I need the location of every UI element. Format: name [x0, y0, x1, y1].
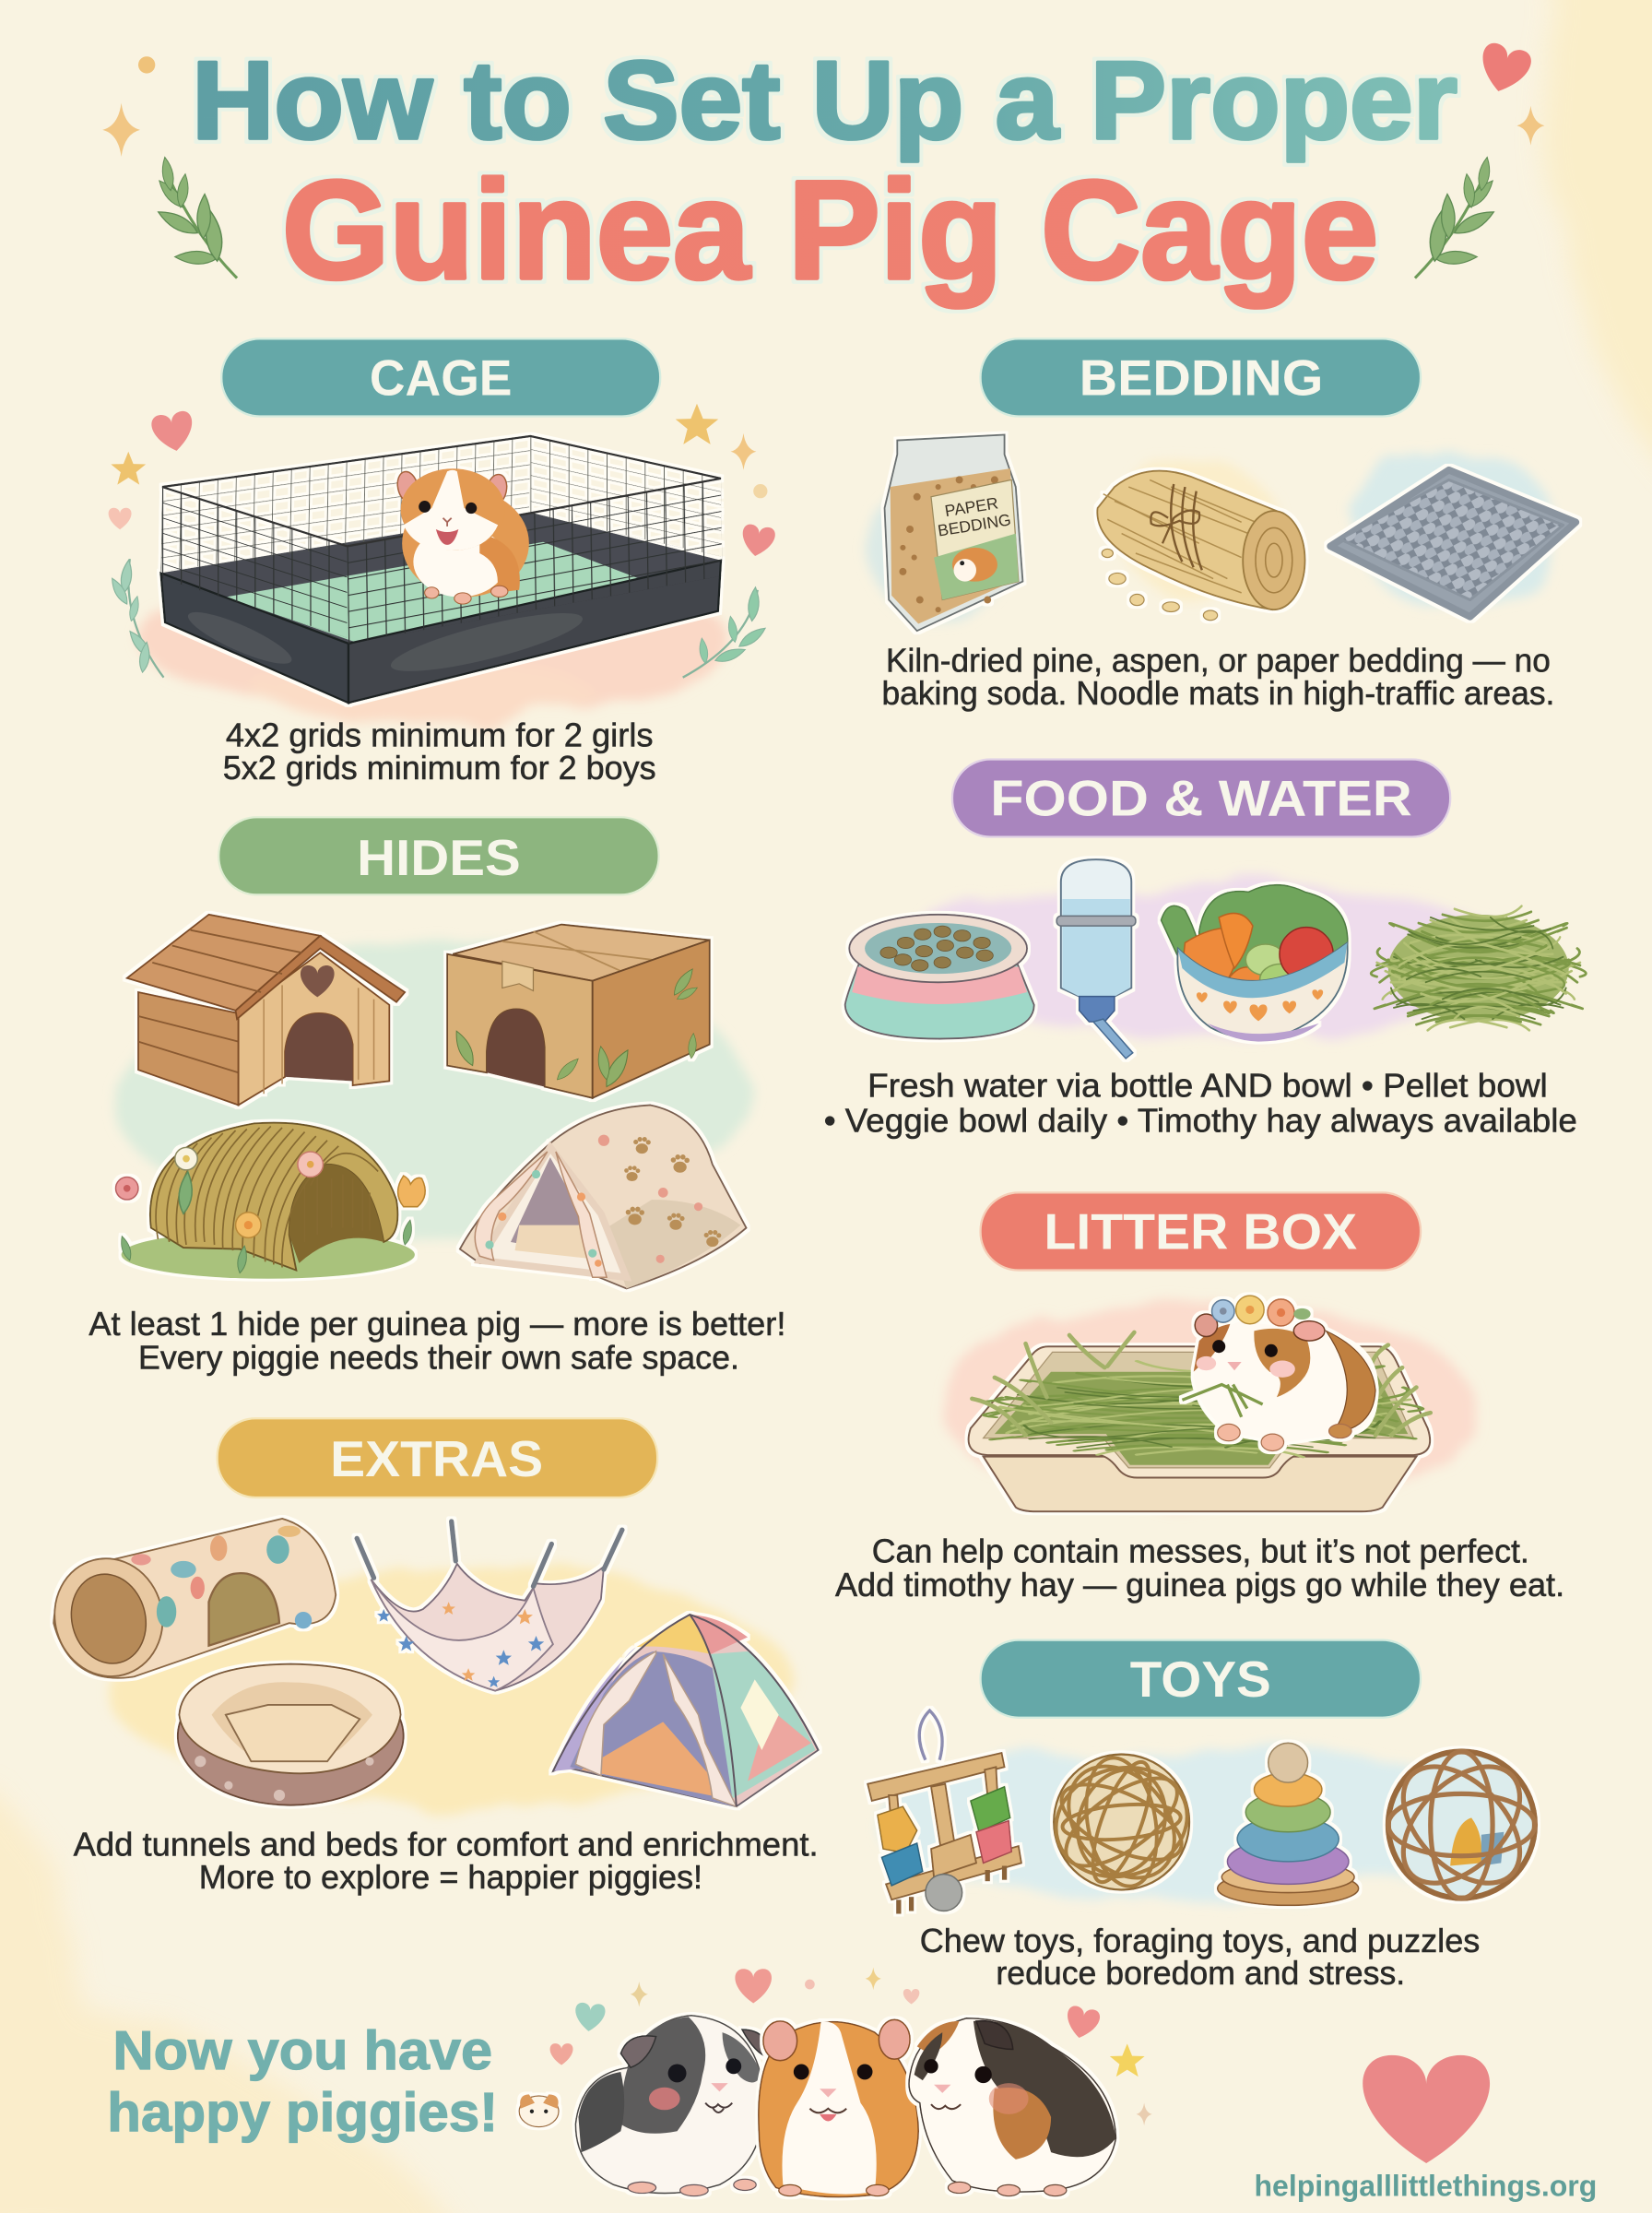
- panel: extras: [41, 1418, 819, 1896]
- food text: Fresh water via bottle AND bowl • Pellet bowl: [867, 1066, 1548, 1104]
- title: [192, 40, 1457, 309]
- cage text: [223, 716, 656, 787]
- heading: bedding: BEDDING: [1080, 349, 1323, 407]
- panel: bedding: [867, 338, 1575, 712]
- heading: food and water: FOOD & WATER: [990, 770, 1412, 827]
- cage text: 5x2 grids minimum for 2 boys: [223, 749, 656, 787]
- icon: cardboard box hide: [447, 925, 710, 1098]
- footer message: happy piggies!: [107, 2081, 498, 2143]
- litter text: Can help contain messes, but it’s not perfect.: [872, 1532, 1529, 1569]
- litter text: [835, 1532, 1564, 1604]
- toys background wash: [875, 1747, 1524, 1902]
- illustration: litter hay: [972, 1332, 1431, 1457]
- panel: toys: [867, 1640, 1541, 1992]
- footer message: [107, 2019, 498, 2143]
- icon: water bottle: [1056, 859, 1136, 1059]
- title line 2: Guinea Pig Cage: [282, 153, 1378, 309]
- extras text: More to explore = happier piggies!: [199, 1858, 702, 1896]
- icon: paper bedding bag: [885, 434, 1022, 631]
- heading: litter box: LITTER BOX: [1044, 1203, 1357, 1260]
- hides text: Every piggie needs their own safe space.: [138, 1339, 739, 1377]
- icon: compressed hay roll: [1097, 471, 1305, 621]
- panel: litter box: [835, 1192, 1564, 1604]
- bedding text: [881, 642, 1554, 712]
- bedding text: Kiln-dried pine, aspen, or paper bedding — no: [886, 642, 1551, 680]
- illustration: three happy guinea pigs: [575, 2016, 1115, 2197]
- guinea pig: orange and white: [759, 2019, 918, 2197]
- cage background wash: [141, 569, 734, 720]
- litter text: Add timothy hay — guinea pigs go while they eat.: [835, 1566, 1564, 1604]
- icon: paper bedding bag: PAPER: [943, 493, 999, 520]
- heading: litter box: [981, 1192, 1421, 1271]
- icon: veggie bowl: [1161, 885, 1348, 1042]
- heading: cage: CAGE: [370, 349, 513, 407]
- icon: timothy hay pile: [1371, 906, 1586, 1030]
- illustration: litter tray: [969, 1346, 1430, 1511]
- heading: extras: EXTRAS: [330, 1430, 543, 1487]
- heading: extras: [218, 1418, 657, 1497]
- panel: cage: [108, 338, 776, 787]
- icon: fabric tent hide: [460, 1105, 747, 1288]
- website credit: helpingalllittlethings.org: [1254, 2170, 1597, 2203]
- guinea pig in cage: [395, 468, 529, 604]
- icon: wooden chew toy: [867, 1710, 1021, 1914]
- icon: willow ball: [1044, 1746, 1199, 1899]
- footer message: Now you have: [112, 2019, 492, 2081]
- extras background wash: [106, 1567, 797, 1806]
- icon: large watercolor heart: [1363, 2055, 1490, 2163]
- footer decorations: [550, 1968, 1152, 2125]
- toys text: [920, 1922, 1480, 1992]
- icon: fleece tunnel: [41, 1519, 336, 1688]
- icon: left leaf sprig: [155, 156, 237, 278]
- icon: noodle mat: [1330, 470, 1575, 617]
- guinea pig: black and white: [575, 2016, 769, 2196]
- icon: wooden house: [127, 915, 405, 1105]
- icon: hay tunnel: [115, 1123, 425, 1279]
- heading: cage: [221, 338, 660, 417]
- icon: puzzle sphere: [1382, 1745, 1541, 1905]
- cage decorations: [108, 404, 776, 678]
- bedding background washes: [867, 447, 1554, 621]
- icon: stacking ring toy: [1218, 1743, 1359, 1905]
- hides text: At least 1 hide per guinea pig — more is better!: [88, 1305, 785, 1343]
- guinea pig: tricolor: [909, 2018, 1115, 2196]
- cage text: 4x2 grids minimum for 2 girls: [226, 716, 654, 754]
- toys text: reduce boredom and stress.: [996, 1954, 1405, 1992]
- toys text: Chew toys, foraging toys, and puzzles: [920, 1922, 1480, 1959]
- flower crown: [1212, 1296, 1311, 1326]
- food text: • Veggie bowl daily • Timothy hay always available: [824, 1102, 1577, 1140]
- food text: [824, 1066, 1577, 1140]
- title line 1: How to Set Up a Proper: [192, 40, 1457, 162]
- heading: toys: TOYS: [1130, 1651, 1271, 1708]
- extras text: Add tunnels and beds for comfort and enrichment.: [74, 1826, 819, 1864]
- icon: pastel play tent: [553, 1615, 819, 1806]
- heading: hides: [218, 817, 659, 894]
- extras text: [74, 1826, 819, 1896]
- hides background wash: [112, 946, 748, 1242]
- heading: hides: HIDES: [357, 829, 521, 886]
- icon: pellet bowl: [845, 915, 1034, 1039]
- watercolor wash: lower left: [0, 1796, 466, 2213]
- icon: pet bed: [178, 1664, 404, 1805]
- icon: star hammock: [357, 1521, 622, 1691]
- watercolor wash: top right: [1543, 0, 1652, 494]
- bedding text: baking soda. Noodle mats in high-traffic areas.: [881, 674, 1554, 712]
- panel: hides: [88, 817, 785, 1377]
- heading: bedding: [981, 338, 1421, 417]
- guinea pig with flower crown: [1182, 1296, 1375, 1450]
- heading: food and water: [952, 759, 1450, 837]
- illustration: cage tub and wire grid: [160, 436, 723, 703]
- heading: toys: [981, 1640, 1421, 1718]
- hides text: [88, 1305, 785, 1377]
- icon: small hamster: [519, 2094, 559, 2127]
- icon: paper bedding bag: BEDDING: [937, 510, 1012, 540]
- panel: food and water: [824, 759, 1586, 1140]
- title decorations: [102, 41, 1544, 278]
- litter background wash: [938, 1303, 1474, 1506]
- icon: right leaf sprig: [1415, 156, 1497, 278]
- food background wash: [881, 882, 1530, 1037]
